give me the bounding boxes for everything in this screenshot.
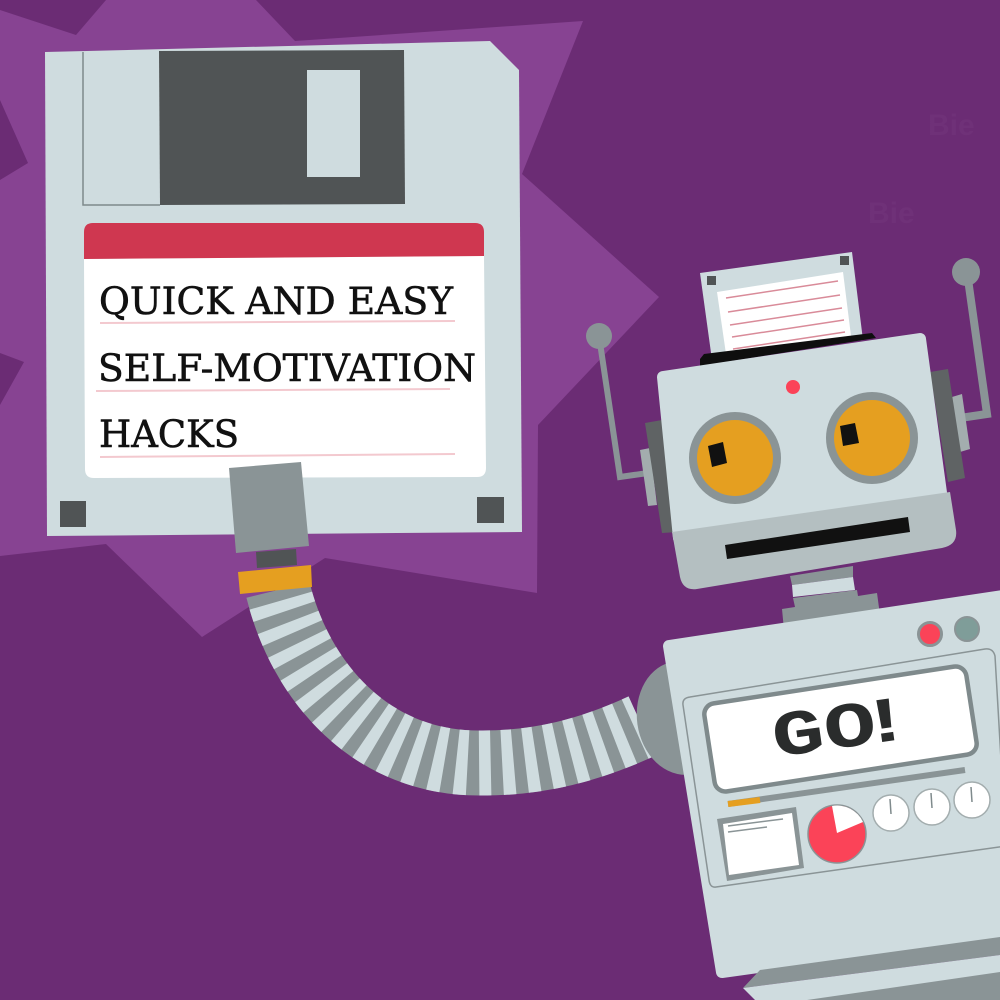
robot neck — [782, 566, 880, 630]
robot body — [669, 595, 1000, 1000]
left eye — [689, 412, 781, 504]
small readout — [717, 807, 804, 881]
right eye — [826, 392, 918, 484]
title — [98, 280, 476, 456]
hose connector — [229, 462, 312, 594]
pie gauge — [808, 805, 866, 863]
forehead light — [786, 380, 800, 394]
control panel outline — [683, 649, 1000, 887]
disk label — [84, 223, 486, 478]
floppy disk — [45, 41, 522, 536]
dials — [873, 782, 990, 831]
robot head — [663, 339, 956, 589]
faint background marks: Bie — [868, 197, 915, 230]
progress bar — [728, 770, 965, 804]
lower body bands — [743, 937, 1000, 1000]
faint background marks: Bie — [928, 109, 975, 142]
status lights — [918, 617, 979, 646]
hose arm — [278, 590, 642, 763]
disk holes — [60, 497, 504, 527]
shoulder joint — [630, 655, 734, 781]
right antenna — [952, 258, 987, 418]
mini floppy on robot head — [700, 252, 876, 366]
robot ears — [640, 369, 970, 533]
robot antennas — [586, 258, 987, 477]
faint background marks — [868, 109, 975, 230]
starburst behind disk — [0, 0, 659, 637]
disk shutter — [83, 50, 405, 205]
display screen — [703, 665, 978, 793]
title: SELF-MOTIVATION — [98, 347, 476, 390]
left antenna — [586, 323, 648, 477]
head face — [663, 339, 942, 538]
head jaw — [672, 492, 956, 589]
disk body — [45, 41, 522, 536]
title: QUICK AND EASY — [99, 280, 454, 323]
torso — [669, 595, 1000, 972]
title: HACKS — [99, 413, 239, 456]
mouth — [725, 517, 910, 559]
display text: GO! — [768, 684, 917, 776]
